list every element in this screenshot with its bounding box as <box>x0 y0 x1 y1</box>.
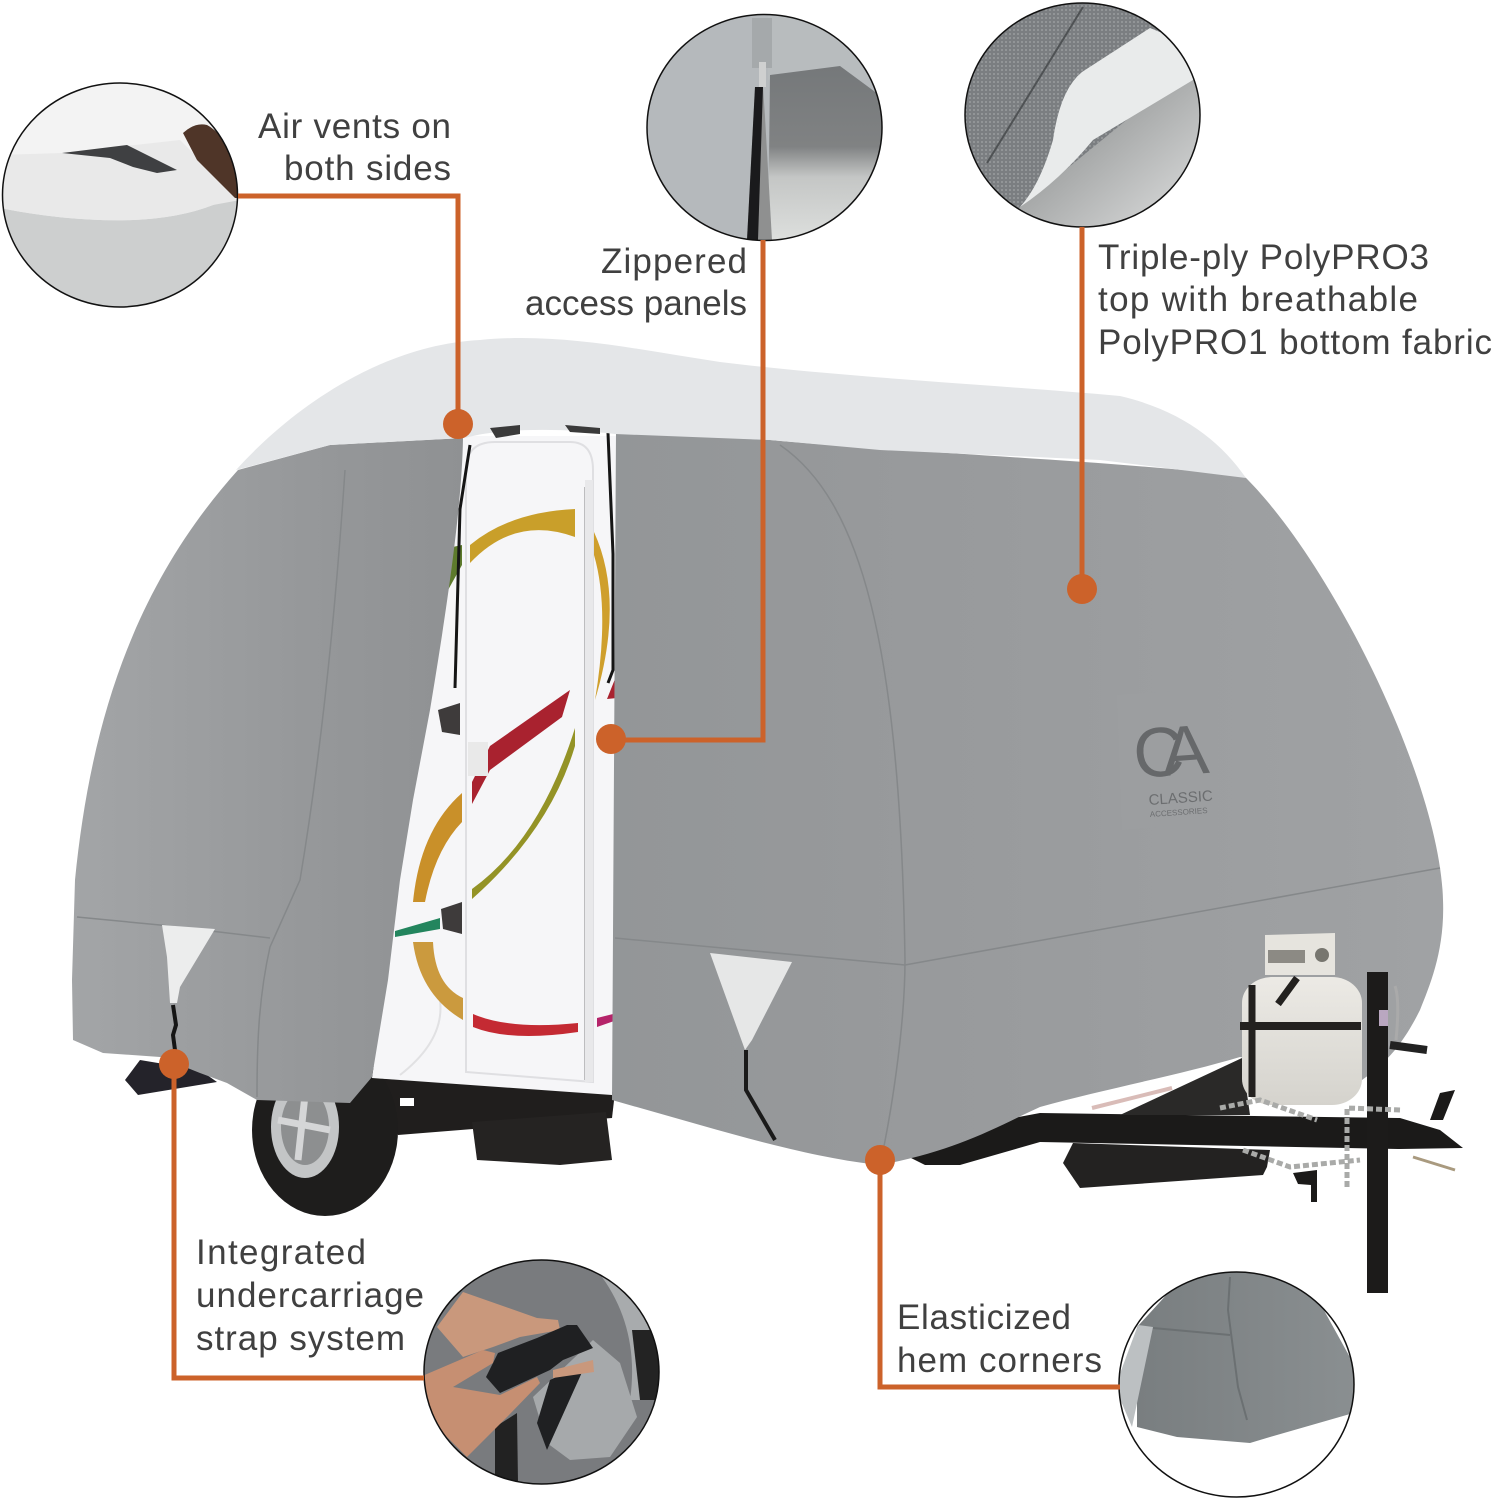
trailer jack <box>1367 972 1427 1293</box>
connector dot <box>443 409 473 439</box>
photo circle: hem corner <box>1120 1272 1354 1443</box>
door top shadow <box>490 425 600 438</box>
cover logo <box>1117 690 1213 830</box>
connector line <box>238 196 458 424</box>
white trailer side <box>372 436 617 1095</box>
grey cover front left flap <box>72 438 463 1103</box>
connector line <box>612 240 763 740</box>
zipper wires <box>455 433 613 688</box>
propane tank <box>1240 933 1362 1105</box>
label: undercarriage <box>196 1276 424 1315</box>
label: Elasticized <box>897 1298 1071 1337</box>
door side vents <box>438 703 488 934</box>
label: access panels <box>525 284 747 323</box>
safety chains <box>1220 1100 1400 1190</box>
label: PolyPRO1 bottom fabric <box>1098 323 1492 362</box>
callout: air vents <box>0 80 473 439</box>
label: Integrated <box>196 1233 366 1272</box>
callout: elasticized hem <box>865 1145 1357 1500</box>
connector dot <box>596 724 626 754</box>
callout: zippered panels <box>525 10 886 754</box>
left frame bracket <box>125 1060 217 1095</box>
label: Air vents on <box>258 107 451 146</box>
label: top with breathable <box>1098 280 1418 319</box>
photo circle: zipper <box>646 10 886 245</box>
label: both sides <box>284 149 451 188</box>
callout: undercarriage strap <box>159 1049 663 1488</box>
cover seams <box>77 445 1440 1165</box>
photo circle: strap buckle <box>420 1258 663 1488</box>
photo circle: air vent <box>0 80 240 310</box>
undercarriage under door <box>372 1078 615 1165</box>
hem triangle right <box>710 953 792 1140</box>
label: Zippered <box>601 242 747 281</box>
connector dot <box>865 1145 895 1175</box>
tongue frame <box>905 1058 1463 1202</box>
connector line <box>1080 227 1084 590</box>
white roof <box>236 338 1246 478</box>
cover logo: CA <box>1131 710 1211 793</box>
connector dot <box>1067 574 1097 604</box>
label: Triple-ply PolyPRO3 <box>1098 238 1429 277</box>
door stripes <box>395 509 617 1036</box>
photo circle: fabric <box>964 0 1204 232</box>
label: hem corners <box>897 1341 1102 1380</box>
trailer illustration <box>72 338 1463 1293</box>
connector line <box>880 1160 1120 1387</box>
hem triangle left <box>162 925 215 1050</box>
wheel <box>252 1044 398 1216</box>
cover logo: ACCESSORIES <box>1150 806 1208 819</box>
door outline and hinge <box>400 442 593 1082</box>
connector line <box>174 1065 424 1378</box>
callout: fabric <box>964 0 1492 604</box>
grey cover right side <box>612 432 1443 1165</box>
connector dot <box>159 1049 189 1079</box>
cover logo: CLASSIC <box>1148 788 1213 809</box>
label: strap system <box>196 1319 405 1358</box>
